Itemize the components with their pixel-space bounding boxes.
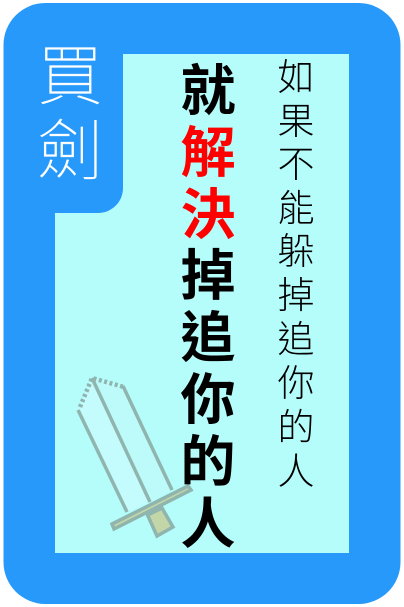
panel: light content area — [55, 54, 349, 553]
heading: side label — [37, 39, 103, 188]
text block: vertical subtitle: 果 — [278, 101, 314, 142]
headline: vertical bold text: 追 — [180, 307, 236, 369]
headline: vertical bold text: 掉 — [180, 245, 236, 307]
headline: vertical bold text: 的 — [180, 431, 236, 493]
text block: vertical subtitle: 躲 — [278, 231, 314, 272]
text block: vertical subtitle: 的 — [278, 407, 314, 448]
headline: vertical bold text: 解 — [180, 122, 236, 184]
text block: vertical subtitle: 掉 — [278, 275, 314, 316]
text block: vertical subtitle: 人 — [278, 451, 314, 492]
headline: vertical bold text — [180, 60, 236, 555]
text block: vertical subtitle: 如 — [278, 57, 314, 98]
text block: vertical subtitle: 不 — [278, 144, 314, 185]
text block: vertical subtitle: 你 — [278, 363, 314, 404]
headline: vertical bold text: 決 — [180, 184, 236, 246]
heading: side label: 劍 — [37, 114, 103, 188]
text block: vertical subtitle — [278, 57, 314, 492]
text block: vertical subtitle: 能 — [278, 188, 314, 229]
headline: vertical bold text: 就 — [180, 60, 236, 122]
heading: side label: 買 — [37, 39, 103, 113]
text block: vertical subtitle: 追 — [278, 319, 314, 360]
icon: sword — [78, 378, 191, 536]
corner tab — [40, 40, 123, 213]
headline: vertical bold text: 你 — [180, 369, 236, 431]
headline: vertical bold text: 人 — [180, 493, 236, 555]
